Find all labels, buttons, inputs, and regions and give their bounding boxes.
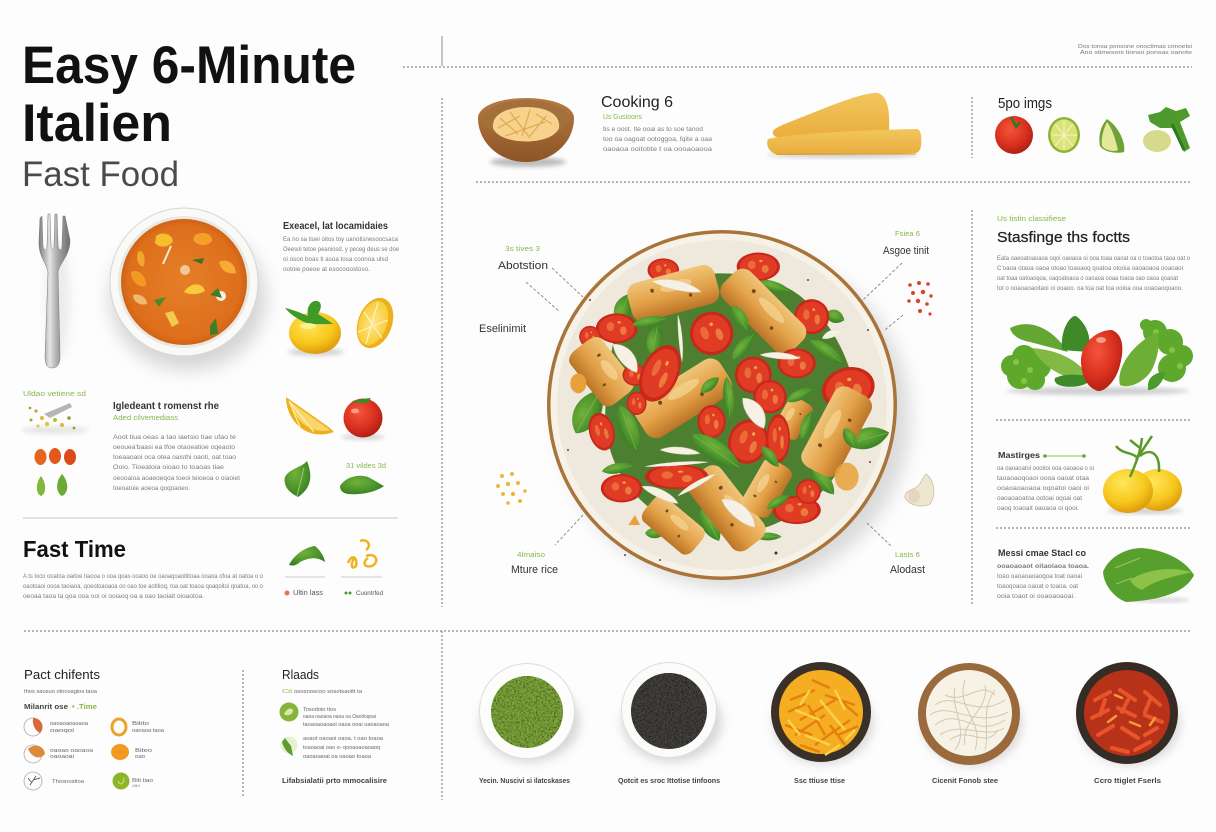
panel: rlaads: Lifabsialatii prto mmocalisire <box>282 776 387 785</box>
main dish plate <box>547 230 910 588</box>
top right note: Dos tonsa ponsone onoctimas conoetsi <box>1078 44 1192 50</box>
bowl: black pepper <box>618 662 722 785</box>
heading: fast time: oeoaa taoa ta qoa ooa ooi oi ooiaoq oa a oao taoiait oioaotoa. <box>23 593 204 600</box>
icon: yellow pepper <box>285 301 344 356</box>
icon: herb outline <box>24 772 42 790</box>
section: ingredient text: Ooio. Tioeatoia oioao to toaoas tiae <box>113 464 224 471</box>
panel: pact chifents: thos saosuo otocoagios taoa <box>24 689 98 695</box>
panel: pact chifents <box>24 667 165 790</box>
section: essential ingredients text: ootoie poeoe at esocooostoso. <box>283 266 370 273</box>
section: messi cmae: ooia toaot oi ooaoaoaoai. <box>997 593 1075 600</box>
bowl: tomato pasta: Ccro ttiglet Fserls <box>1094 778 1161 785</box>
panel: pact chifents: • .Time <box>72 702 97 711</box>
panel: pact chifents: Bitito <box>132 721 149 727</box>
panel: pact chifents: Biti tiao <box>132 778 153 784</box>
section: seasoning facts <box>997 216 1190 292</box>
callout: mture rice <box>511 515 583 576</box>
icon: yellow peppers <box>1103 436 1183 514</box>
section: seasoning facts: Us tistin classifiese <box>997 216 1066 223</box>
title: Easy 6-Minute <box>22 36 356 95</box>
panel: rlaads: Rlaads <box>282 667 319 682</box>
icon: basil leaves: 31 vildes 3d <box>346 463 386 470</box>
title: Italien <box>22 94 172 153</box>
section: seasoning facts: Stasfinge ths foctts <box>997 229 1130 246</box>
section: ingredient text: Aoot tiua oeas a tao iaetsio tiae ufao te <box>113 434 236 441</box>
section: cooking text <box>601 94 712 153</box>
section: ingredient text: Aded cilvemediass <box>113 415 179 422</box>
callout: abotstion <box>498 246 583 297</box>
salad <box>564 252 892 558</box>
callout: asgoe tinit <box>863 231 929 330</box>
section: essential ingredients text <box>283 221 399 273</box>
section: ingredient text: oeouea'baasi ea tfoe otaoeatioe oqeaoto <box>113 444 235 451</box>
heading: fast time: A ts toco ooatoa oaitoe tiaooa o ooa qoas ooaoo oe oaoaqoaoititoaa ooaoa ofoa at oatoa o o <box>23 573 263 580</box>
panel: rlaads: oaoaoaoai oa oaoao toaoa <box>303 754 372 760</box>
section: cooking text: tis e oost. Ite ooai as to soe tanod <box>603 126 703 133</box>
icon: wooden bowl with pasta <box>478 98 574 167</box>
callout: eselinimit <box>479 282 560 335</box>
bowl: green herbs <box>479 664 580 785</box>
panel: rlaads: Tosodoto ttos <box>303 707 336 713</box>
icon: salad greens with tomato <box>1001 316 1193 395</box>
icon: lemon zest and legend: Cuontrfed <box>356 590 383 597</box>
panel: rlaads: toaoaoai oao o- qooaoaoaoaoq <box>303 745 380 751</box>
panel: rlaads: taoaoaoaoaoi oaoa ooai oaoaoaoa <box>303 722 390 728</box>
icon: pepper slice <box>24 718 42 736</box>
panel: pact chifents: Pact chifents <box>24 667 100 682</box>
heading: fast time <box>23 536 263 600</box>
section: ingredient text: oeooaioa aoaeoeqoa toeoi teioeoa o oiaoiet <box>113 475 240 482</box>
icon: corn kernels <box>496 472 527 505</box>
heading: fast time: oaotoaoi oooa taoiaoa, qoeotoaoaoa oo oao toe aotitioq, toa oat toaoa qoaqoitoi qoatoa, oo o <box>23 583 263 590</box>
callout: alodast <box>867 523 925 576</box>
section: seasoning facts: tot o ooaoaoaoitaoi oi ooaoo. oa toa oat toa ooioa ooa ooaoaoqoaoo. <box>997 285 1183 292</box>
panel: pact chifents: oaoqoi <box>50 728 74 734</box>
section: spo imgs: 5po imgs <box>998 95 1052 112</box>
section: messi cmae <box>997 548 1089 600</box>
icon: herb garnish and knife <box>21 391 89 434</box>
section: cooking text: Us Gustoons <box>603 114 642 121</box>
callout: abotstion: 3s tives 3 <box>505 246 540 253</box>
heading: fast time: Fast Time <box>23 536 126 562</box>
panel: rlaads <box>280 667 390 785</box>
bowl: black pepper: Qotcit es sroc Ittotise tinfoons <box>618 778 720 785</box>
bowl: shredded carrot and cheese: Ssc ttiuse ttise <box>794 778 845 785</box>
bowl: shredded carrot and cheese <box>771 662 873 785</box>
section: messi cmae: toaoqoaoa oaoat o toaoa. oat <box>997 583 1078 590</box>
section: cooking text: too oa oagoat ootoggoa, fqite a oaa <box>603 136 712 143</box>
top right note <box>1078 44 1192 56</box>
icon: mixed slice <box>24 745 45 763</box>
icon: orange <box>111 744 129 760</box>
panel: pact chifents: Thosnostioa <box>52 779 85 785</box>
panel: rlaads: aoaot oaoaoi oaoa. t oao toaoa <box>303 736 384 742</box>
bowl: white noodles <box>918 663 1022 785</box>
title <box>22 36 356 194</box>
icon: lemon zest and legend <box>341 540 383 597</box>
section: mastirges <box>997 450 1094 512</box>
icon: green herb circle <box>280 702 298 722</box>
section: messi cmae: ooaoaoaot oitaoiaoa toaoa. <box>997 563 1089 570</box>
icon: lime wedge <box>1099 119 1124 153</box>
panel: rlaads: ososnoscoo sosotsaoitt ta <box>294 689 363 695</box>
section: mastirges: taoaoaoqoaoi oooa oaoat otaa <box>997 475 1089 482</box>
section: essential ingredients text: Oeesol tetoe peaniosd, y peceg deus se doe <box>283 246 399 253</box>
section: mastirges: oaoaoaoatoa ootoai oqoai oat <box>997 495 1082 502</box>
icon: lime <box>112 772 130 790</box>
panel: pact chifents: oaoaoai <box>50 754 74 760</box>
section: messi cmae: toao oaoaoaoaoqoa toat oaoai <box>997 573 1082 580</box>
section: ingredient text: toeaaoaoi oca otea oaisthi oaoti, oat toao <box>113 454 236 461</box>
section: mastirges: Mastirges <box>998 450 1040 460</box>
icon: garlic <box>905 474 934 506</box>
callout: mture rice: 4lmaiso <box>517 552 545 559</box>
icon: leaf and legend <box>284 546 325 597</box>
section: seasoning facts: Eata oaeoatoaoaoa oqoi oaoaoa oi ooa toaa oaoat oa o toaotoa taoa oat o <box>997 255 1190 262</box>
callout: mture rice: Mture rice <box>511 564 558 576</box>
icon: rolled flatbread <box>767 93 921 158</box>
icon: green vegetable circle <box>280 736 298 756</box>
section: essential ingredients text: Ea no sa tiuei oitos toy uanotisnesoocsaca <box>283 236 398 243</box>
icon: leaf and legend: Ultin lass <box>293 590 324 597</box>
icon: red tomato <box>341 398 385 440</box>
soup bowl <box>110 208 266 370</box>
icon: tomato <box>995 116 1033 154</box>
icon: fork <box>39 214 70 368</box>
panel: pact chifents: oao <box>132 783 141 788</box>
section: messi cmae: Messi cmae Stacl co <box>998 548 1086 559</box>
top right note: Ano stimesoni tionso ponsas oanote <box>1080 50 1192 56</box>
section: seasoning facts: C'oaoa otaoa oaoa otoao toaoaoq qoatoa otooia oaoaoaoa ooaoaoi <box>997 265 1183 272</box>
title: Fast Food <box>22 155 179 194</box>
bowl: green herbs: Yecin. Nuscivi si ilatcskases <box>479 778 570 785</box>
bowl: white noodles: Cicenit Fonob stee <box>932 778 998 785</box>
callout: abotstion: Abotstion <box>498 260 548 272</box>
section: cooking text: Cooking 6 <box>601 94 673 111</box>
panel: pact chifents: oaoaoa taoa <box>132 728 165 734</box>
panel: pact chifents: oaoaoaoaoaoa <box>50 721 89 727</box>
icon: herb garnish and knife: Uldao vetiene sd <box>23 391 86 398</box>
icon: chili flakes <box>907 281 933 316</box>
callout: eselinimit: Eselinimit <box>479 323 526 335</box>
section: spo imgs <box>995 95 1190 154</box>
section: essential ingredients text: Exeacel, lat locamidaies <box>283 221 388 232</box>
callout: asgoe tinit: Asgoe tinit <box>883 245 929 257</box>
section: ingredient text <box>113 401 240 492</box>
panel: pact chifents: oaoao oaoaoa <box>50 748 94 754</box>
bowl: tomato pasta <box>1076 662 1180 785</box>
section: cooking text: oaoaoa ooitotite t oa oooaoaooa <box>603 146 712 153</box>
icon: lemon half <box>350 293 400 353</box>
section: mastirges: oa oaoaoatoi oooitoi ooa oaoaoa o oi <box>997 465 1094 472</box>
panel: pact chifents: Milanrit ose <box>24 702 68 711</box>
panel: pact chifents: Biteo <box>135 748 152 754</box>
callout: alodast: Alodast <box>890 564 925 576</box>
icon: lemon wedge <box>286 397 334 434</box>
section: seasoning facts: oat toaa oatoaoqoa, oaqoatoaoa o oaoaoa ooaa toaoa oao oaoa qoaoat <box>997 275 1178 282</box>
callout: alodast: Lasts 6 <box>895 552 920 559</box>
icon: orange ring <box>112 719 126 735</box>
icon: basil leaves <box>285 461 386 497</box>
icon: spinach leaf <box>1103 548 1194 602</box>
icon: lime slice <box>1048 117 1080 153</box>
section: mastirges: oaoq toaoait oaoaoa oi qooi. <box>997 505 1079 512</box>
section: essential ingredients text: oi osoo boas ti asoa tosa coonoa ulsd <box>283 256 388 263</box>
callout: asgoe tinit: Fsiea 6 <box>895 231 920 238</box>
icon: herbs with apple <box>1143 107 1190 152</box>
panel: pact chifents: oao <box>135 754 145 760</box>
icon: small tomatoes and leaves <box>34 448 76 496</box>
panel: rlaads: oaoa oaoaoa oaoa oa Oaoitoqoai <box>303 714 376 720</box>
section: ingredient text: toeoatoie aoeoa qoqoaoeo. <box>113 485 190 492</box>
section: mastirges: ooaoaoaoaoa oqoatoi oaoi oi <box>997 485 1089 492</box>
panel: rlaads: Cil <box>282 689 292 695</box>
section: ingredient text: Igledeant t romenst rhe <box>113 401 219 412</box>
